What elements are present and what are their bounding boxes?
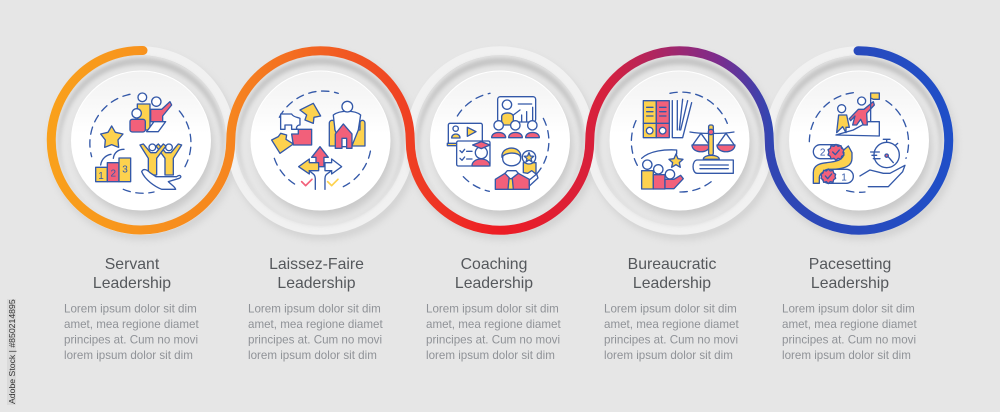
icon: servant leadership: 2 — [111, 169, 117, 180]
column: pacesetting leadership: lorem ipsum dolor sit dim — [782, 349, 911, 362]
column: pacesetting leadership: amet, mea regione diamet — [782, 318, 917, 331]
column: bureaucratic leadership: lorem ipsum dolor sit dim — [604, 349, 733, 362]
column: bureaucratic leadership: principes at. Cum no movi — [604, 334, 738, 346]
column: coaching leadership: amet, mea regione diamet — [426, 318, 561, 331]
column: laissez-faire leadership: Leadership — [277, 275, 356, 292]
column: coaching leadership: Coaching — [461, 256, 527, 273]
icon: pacesetting leadership: 2 — [820, 148, 826, 159]
column: coaching leadership — [426, 256, 561, 362]
column: pacesetting leadership: Pacesetting — [809, 256, 891, 273]
column: coaching leadership: principes at. Cum no movi — [426, 334, 560, 346]
column: bureaucratic leadership: Leadership — [633, 275, 711, 292]
column: laissez-faire leadership: principes at. Cum no movi — [248, 334, 382, 346]
icon: pacesetting leadership — [809, 93, 909, 192]
column: servant leadership: lorem ipsum dolor sit dim — [64, 349, 193, 362]
column: coaching leadership: Leadership — [455, 275, 533, 292]
icon: coaching leadership — [447, 93, 549, 191]
column: bureaucratic leadership: amet, mea regione diamet — [604, 318, 739, 331]
column: servant leadership: Lorem ipsum dolor sit dim — [64, 302, 197, 316]
column: laissez-faire leadership: Laissez-Faire — [269, 256, 364, 273]
circle bases with shadows — [51, 51, 952, 236]
column: servant leadership: Leadership — [93, 275, 171, 292]
column: bureaucratic leadership: Lorem ipsum dolor sit dim — [604, 302, 737, 316]
icon: bureaucratic leadership — [631, 92, 735, 192]
icon: servant leadership — [90, 93, 191, 193]
column: laissez-faire leadership — [248, 256, 383, 362]
column: servant leadership: principes at. Cum no movi — [64, 334, 198, 346]
column: laissez-faire leadership: Lorem ipsum dolor sit dim — [248, 302, 381, 316]
column: laissez-faire leadership: lorem ipsum dolor sit dim — [248, 349, 377, 362]
icon: pacesetting leadership: 1 — [841, 172, 847, 183]
stock id side label: Adobe Stock | #850214895 — [7, 299, 17, 404]
column: coaching leadership: Lorem ipsum dolor sit dim — [426, 302, 559, 316]
gradient flowing ribbon through the five circles — [51, 50, 949, 230]
column: bureaucratic leadership — [604, 256, 739, 362]
column: pacesetting leadership — [782, 256, 917, 362]
column: servant leadership: amet, mea regione diamet — [64, 318, 199, 331]
icon: laissez-faire leadership — [272, 91, 371, 189]
column: pacesetting leadership: principes at. Cum no movi — [782, 334, 916, 346]
column: bureaucratic leadership: Bureaucratic — [628, 256, 716, 273]
icon: servant leadership: 3 — [122, 165, 128, 176]
column: coaching leadership: lorem ipsum dolor sit dim — [426, 349, 555, 362]
icon: servant leadership: 1 — [98, 171, 104, 182]
column: servant leadership — [64, 256, 199, 362]
column: laissez-faire leadership: amet, mea regione diamet — [248, 318, 383, 331]
column: pacesetting leadership: Lorem ipsum dolor sit dim — [782, 302, 915, 316]
column: pacesetting leadership: Leadership — [811, 275, 889, 292]
column: servant leadership: Servant — [105, 256, 160, 273]
